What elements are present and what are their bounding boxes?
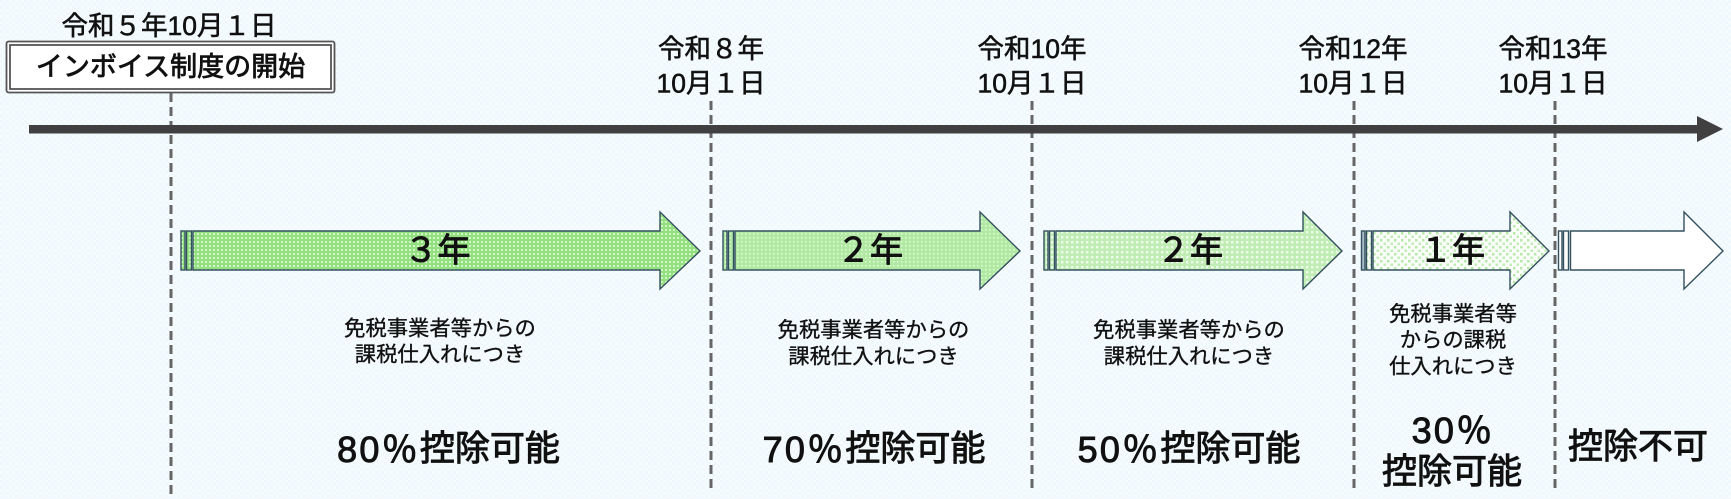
note: 50% period: 課税仕入れにつき — [1104, 344, 1274, 368]
arrow: 3 years: ３年 — [404, 232, 470, 268]
date: Reiwa 12 — [1299, 34, 1407, 98]
date: Reiwa 10 — [978, 34, 1086, 98]
note: 50% period: 免税事業者等からの — [1093, 318, 1285, 342]
date: Reiwa 13: 10月１日 — [1499, 68, 1607, 98]
note: 80% period: 免税事業者等からの — [344, 316, 536, 340]
start label box: インボイス制度の開始 — [36, 52, 305, 82]
arrow: 3 years — [181, 212, 700, 289]
note: 50% period — [1093, 318, 1285, 368]
arrow: 2 years (70%) — [723, 212, 1020, 289]
start date label: 令和５年10月１日 — [62, 11, 276, 41]
note: 70% period: 免税事業者等からの — [778, 318, 969, 342]
rate: 80%: 80％控除可能 — [337, 428, 560, 470]
rate: 50%: 50％控除可能 — [1078, 428, 1300, 470]
note: 30% period: からの課税 — [1400, 328, 1506, 352]
dashed period lines — [171, 93, 1555, 497]
note: 80% period — [344, 316, 536, 366]
start label box — [6, 42, 334, 92]
rate: 70%: 70％控除可能 — [763, 428, 985, 470]
note: 30% period: 仕入れにつき — [1389, 354, 1517, 378]
arrow: 2 years (50%) — [1044, 212, 1342, 289]
note: 70% period — [778, 318, 969, 368]
timeline arrow — [29, 116, 1723, 142]
date: Reiwa 8: 令和８年 — [658, 34, 764, 64]
arrow: 1 year — [1362, 212, 1549, 289]
date: Reiwa 13: 令和13年 — [1499, 34, 1607, 64]
date: Reiwa 8: 10月１日 — [657, 68, 765, 98]
date: Reiwa 13 — [1499, 34, 1607, 98]
date: Reiwa 12: 10月１日 — [1299, 68, 1407, 98]
date: Reiwa 12: 令和12年 — [1299, 34, 1407, 64]
arrow: 2 years (70%): ２年 — [837, 232, 903, 268]
date: Reiwa 8 — [657, 34, 765, 98]
note: 30% period — [1389, 302, 1517, 378]
arrow: no deduction — [1558, 212, 1723, 289]
note: 70% period: 課税仕入れにつき — [788, 344, 959, 368]
rate: 30% — [1382, 410, 1522, 492]
date: Reiwa 10: 10月１日 — [978, 68, 1086, 98]
rate: 30%: 30％ — [1412, 410, 1494, 450]
note: 80% period: 課税仕入れにつき — [355, 342, 525, 366]
rate: 30%: 控除可能 — [1382, 452, 1522, 492]
note: 30% period: 免税事業者等 — [1389, 302, 1517, 326]
arrow: 2 years (50%): ２年 — [1157, 232, 1223, 268]
date: Reiwa 10: 令和10年 — [978, 34, 1086, 64]
arrow: 1 year: １年 — [1419, 232, 1485, 268]
rate: none: 控除不可 — [1568, 428, 1708, 466]
